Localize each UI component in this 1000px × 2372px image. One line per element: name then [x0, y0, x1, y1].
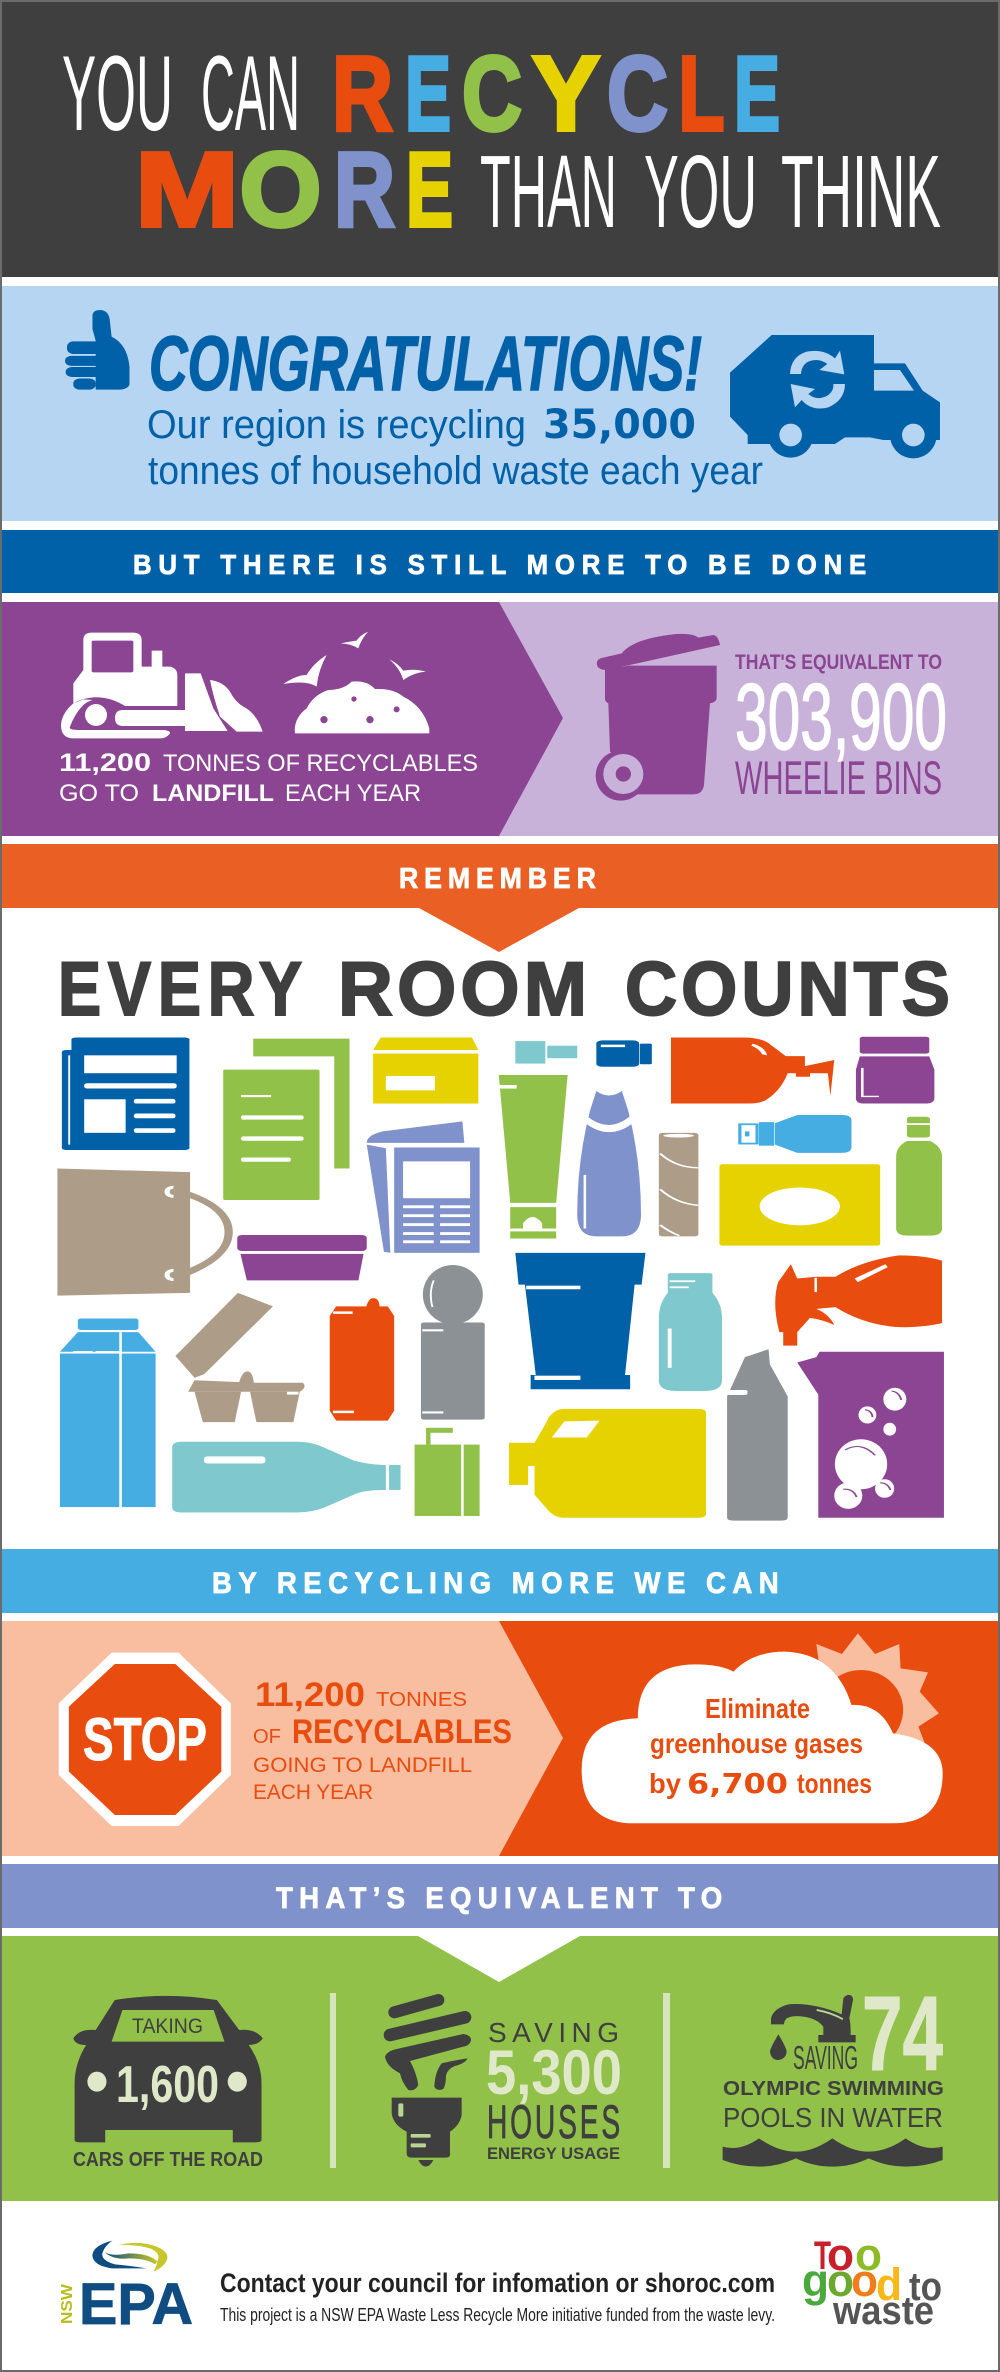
logo: too good to waste: o [851, 2255, 878, 2306]
house savings text: 5,300 [486, 2038, 622, 2108]
banner: still more to be done [0, 530, 1000, 593]
landfill text [59, 749, 478, 807]
icon: detergent box with bubbles [797, 1352, 944, 1518]
title line 2: R [334, 131, 395, 249]
eliminate text: tonnes [797, 1768, 872, 1799]
title line 2: E [406, 131, 453, 249]
icon: tissue box [719, 1164, 880, 1246]
title line 1 [62, 33, 780, 153]
panel: title header [0, 0, 1000, 277]
contact text: Contact your council for infomation or shoroc.com [220, 2268, 775, 2298]
house savings text: SAVING [488, 2017, 619, 2048]
stop text: GOING TO LANDFILL [253, 1754, 472, 1777]
icon: landfill mound with birds [283, 632, 429, 733]
icon: grey spray can [727, 1349, 788, 1521]
water savings text: SAVING [793, 2039, 858, 2076]
eliminate text [649, 1693, 872, 1800]
title line 2: THAN [480, 134, 617, 249]
house savings text [486, 2017, 622, 2163]
banner: by recycling more we can: BY RECYCLING MORE WE CAN [212, 1567, 779, 1600]
icon: dripping tap [770, 1995, 856, 2060]
eliminate text: greenhouse gases [650, 1728, 863, 1759]
water savings text [723, 1975, 944, 2133]
stop text: OF [253, 1726, 281, 1748]
logo: NSW EPA: EPA [79, 2272, 193, 2337]
panel: footer [59, 2229, 942, 2337]
wheelie bins text: THAT'S EQUIVALENT TO [735, 651, 942, 674]
icon: paper bag [57, 1169, 233, 1296]
icon: thumbs up [65, 310, 129, 390]
title line 2: YOU [644, 134, 757, 249]
congratulations text [147, 402, 763, 493]
icon: soap pump bottle [671, 1037, 834, 1104]
banner: remember [0, 844, 1000, 952]
icon: paper documents [223, 1039, 350, 1200]
icon: plastic tub [237, 1235, 367, 1280]
title line 1: C [607, 35, 668, 153]
logo: too good to waste: g [802, 2255, 829, 2306]
icon: cardboard roll [659, 1133, 698, 1236]
logo: too good to waste: T [814, 2234, 831, 2278]
icon: milk carton [60, 1319, 156, 1507]
icon: stop sign: STOP [83, 1706, 207, 1773]
icon: wheelie bin [596, 634, 720, 801]
logo: too good to waste: d [876, 2259, 902, 2310]
icon: energy saving bulb [385, 2000, 471, 2167]
logo: too good to waste: o [827, 2255, 854, 2306]
recyclable objects illustration [57, 1037, 944, 1521]
contact text: This project is a NSW EPA Waste Less Recycle More initiative funded from the waste levy. [220, 2305, 775, 2325]
title line 1: YOU [62, 33, 173, 153]
icon: car [73, 1996, 263, 2142]
house savings text: ENERGY USAGE [487, 2144, 620, 2163]
panel: savings [0, 1936, 1000, 2201]
congratulations text: tonnes of household waste each year [148, 449, 763, 493]
icon: glass jar [659, 1273, 722, 1391]
title line 2: M [135, 131, 239, 249]
stop text [253, 1676, 512, 1804]
logo: too good to waste: waste [832, 2289, 934, 2333]
panel: stop and eliminate [0, 1621, 1000, 1856]
icon: green tube [499, 1075, 568, 1239]
congratulations text: Our region is recycling [147, 403, 526, 447]
car text: TAKING [132, 2015, 203, 2038]
title line 2: O [240, 131, 322, 249]
icon: small blue bottle [740, 1115, 851, 1153]
contact text [220, 2268, 775, 2325]
icon: shampoo bottle [577, 1091, 641, 1236]
icon: blue cup [515, 1253, 645, 1389]
banner: by recycling more we can [0, 1549, 1000, 1613]
icon: purple jar [856, 1037, 934, 1104]
title line 1: R [332, 35, 393, 153]
water savings text: 74 [862, 1975, 943, 2093]
logo: NSW EPA [59, 2241, 193, 2337]
landfill text: EACH YEAR [285, 780, 421, 807]
icon: yellow jug [509, 1409, 706, 1518]
eliminate text: 6,700 [687, 1767, 788, 1800]
icon: glass bottle [172, 1442, 401, 1512]
banner: that's equivalent to [0, 1864, 1000, 1928]
title line 1: E [405, 35, 451, 153]
icon: cloud and sun [582, 1633, 943, 1823]
logo: too good to waste [802, 2229, 942, 2333]
icon: water waves [723, 2138, 943, 2167]
banner: that's equivalent to: THAT’S EQUIVALENT TO [276, 1882, 722, 1915]
logo: too good to waste: to [909, 2265, 942, 2309]
landfill text: LANDFILL [152, 780, 274, 807]
wheelie bins text [735, 651, 947, 804]
icon: juice box [415, 1428, 480, 1516]
heading: every room counts [58, 946, 950, 1032]
eliminate text: by [649, 1768, 681, 1799]
icon: drink can [330, 1298, 394, 1421]
logo: NSW EPA: NSW [59, 2284, 76, 2324]
panel: landfill [0, 602, 1000, 836]
banner: still more to be done: BUT THERE IS STILL MORE TO BE DONE [133, 549, 866, 580]
icon: spray nozzle parts [515, 1040, 652, 1067]
water savings text: OLYMPIC SWIMMING [723, 2078, 944, 2100]
landfill text: GO TO [59, 780, 139, 807]
car text [73, 2015, 263, 2171]
title line 1: CAN [201, 33, 300, 153]
water savings text: POOLS IN WATER [723, 2102, 943, 2133]
stop text: TONNES [376, 1689, 467, 1711]
icon: egg carton [175, 1293, 305, 1422]
heading: every room counts: EVERY [58, 946, 302, 1031]
panel: congratulations [0, 286, 1000, 521]
stop text: 11,200 [255, 1676, 365, 1714]
logo: too good to waste: o [855, 2229, 882, 2280]
congratulations heading: CONGRATULATIONS! [149, 321, 702, 407]
icon: green bottle [896, 1117, 942, 1236]
landfill text: TONNES OF RECYCLABLES [163, 750, 478, 777]
landfill text: 11,200 [59, 749, 151, 777]
banner: remember: REMEMBER [399, 862, 596, 894]
icon: recycling truck [730, 335, 940, 458]
logo: too good to waste: o [827, 2229, 854, 2280]
heading: every room counts: ROOM [338, 947, 587, 1032]
stop text: EACH YEAR [253, 1781, 373, 1804]
icon: newspaper [62, 1037, 189, 1150]
heading: every room counts: COUNTS [625, 946, 950, 1031]
icon: grey tin with ball [421, 1265, 485, 1420]
congratulations text: 35,000 [543, 402, 696, 448]
car text: CARS OFF THE ROAD [73, 2148, 263, 2171]
stop text: RECYCLABLES [292, 1713, 512, 1751]
eliminate text: Eliminate [705, 1693, 810, 1724]
icon: spray bottle [775, 1255, 942, 1346]
icon: stop sign [59, 1653, 231, 1826]
title line 1: Y [532, 35, 600, 153]
title line 1: C [462, 35, 522, 153]
title line 1: E [734, 35, 780, 153]
house savings text: HOUSES [487, 2097, 620, 2149]
icon: bulldozer [61, 633, 263, 738]
icon: magazine [367, 1121, 480, 1253]
title line 2 [135, 131, 941, 249]
title line 1: L [678, 35, 724, 153]
car text: 1,600 [116, 2056, 219, 2114]
icon: cardboard box [373, 1037, 478, 1104]
